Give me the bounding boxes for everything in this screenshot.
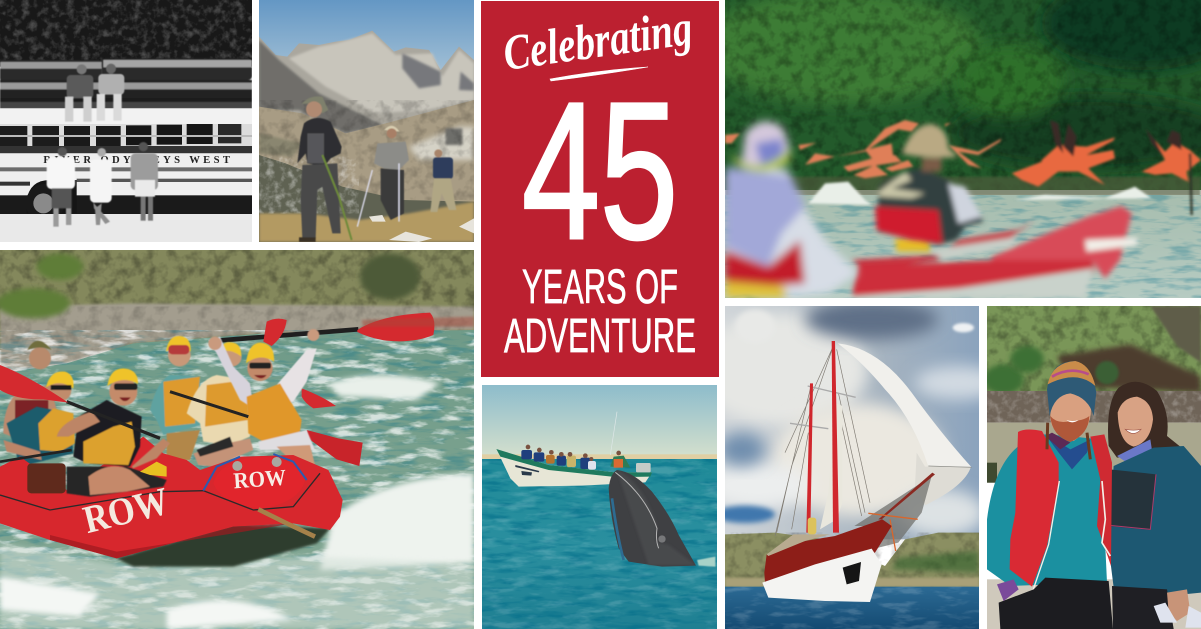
mangrove foliage xyxy=(702,0,1201,197)
stacked rafts on roof xyxy=(0,58,252,109)
red wooden hull xyxy=(764,519,892,583)
lower rocks xyxy=(987,463,1201,629)
rope bundle xyxy=(258,509,315,537)
paddle across raft xyxy=(170,392,248,417)
bowsprit netting xyxy=(854,473,935,551)
bus body xyxy=(0,108,252,223)
back rafter xyxy=(3,341,57,437)
masts xyxy=(806,341,839,533)
hiker in middle xyxy=(357,126,409,227)
lagoon water xyxy=(725,182,1201,298)
sea xyxy=(482,459,717,629)
flamingos right flock xyxy=(1142,128,1201,215)
rocky bank xyxy=(987,391,1201,423)
sky xyxy=(259,0,474,100)
hillside xyxy=(0,250,474,373)
hiker at back xyxy=(430,149,456,212)
red vest left xyxy=(1010,430,1059,587)
grey whale xyxy=(609,470,696,567)
white hull xyxy=(762,549,882,602)
raft logo on side: ROW xyxy=(79,479,173,542)
rigging xyxy=(775,346,870,536)
green hillside xyxy=(984,306,1201,396)
raised paddle xyxy=(217,313,434,341)
black hull plate xyxy=(843,562,861,584)
spinnaker sail xyxy=(838,343,972,505)
photo: smiling couple xyxy=(987,306,1201,629)
river xyxy=(987,423,1201,483)
sea xyxy=(725,587,979,629)
hiker in front xyxy=(297,96,352,242)
knit beanie xyxy=(1047,361,1096,416)
woman xyxy=(1108,382,1201,629)
flamingos centre flock xyxy=(1012,120,1115,187)
photo: flamingos and kayaks xyxy=(725,0,1201,298)
photo: hikers in the mountains xyxy=(259,0,474,242)
furled white sails xyxy=(820,403,842,529)
rafter cheering in front xyxy=(208,329,319,465)
rocky foreground xyxy=(259,155,474,242)
kayak red tube xyxy=(825,206,1138,298)
man xyxy=(987,361,1113,629)
raft logo on front: ROW xyxy=(233,465,287,493)
paddler left in blue xyxy=(3,372,75,467)
splash xyxy=(697,557,715,567)
red vest right xyxy=(1090,434,1112,566)
brown bag xyxy=(27,463,66,493)
people on the roof xyxy=(65,64,124,122)
panel: red title xyxy=(481,0,719,377)
distant red paddle and second raft xyxy=(263,317,474,408)
bus lettering: RIVER ODYSSEYS WEST xyxy=(43,155,230,166)
dark trees xyxy=(0,0,252,67)
paddle held across xyxy=(0,365,160,462)
face and beard xyxy=(1050,393,1091,441)
big number: 45 xyxy=(522,62,678,280)
boat xyxy=(496,412,652,487)
hills xyxy=(725,533,979,588)
trousers xyxy=(999,578,1113,629)
subtitle line 2: ADVENTURE xyxy=(504,310,696,363)
subtitle line 1: YEARS OF xyxy=(522,261,678,314)
three people standing xyxy=(47,142,158,227)
photo: whitewater raft xyxy=(0,250,474,629)
rafter in cream xyxy=(187,342,253,467)
crew xyxy=(808,518,816,534)
raft hull xyxy=(0,437,343,558)
rafter laughing in front xyxy=(57,368,170,497)
red blade at right xyxy=(307,430,363,466)
mountains xyxy=(259,31,474,242)
photo: red-masted sailing ship xyxy=(725,306,979,629)
sky xyxy=(482,385,717,456)
rafter in lime xyxy=(150,336,202,462)
dark water under hull xyxy=(117,525,330,567)
flamingos left flock xyxy=(725,120,1002,178)
photo: vintage bus with rafts xyxy=(0,0,252,242)
sky and clouds xyxy=(695,299,1002,539)
river water xyxy=(0,330,474,629)
blurred paddler in front xyxy=(725,121,858,298)
photo: whale and panga boat xyxy=(482,385,717,629)
ground xyxy=(0,214,252,242)
yellow bag xyxy=(140,462,167,477)
deck railing xyxy=(767,534,830,556)
paddler with tan hat xyxy=(875,124,983,245)
sandy horizon xyxy=(482,454,717,459)
